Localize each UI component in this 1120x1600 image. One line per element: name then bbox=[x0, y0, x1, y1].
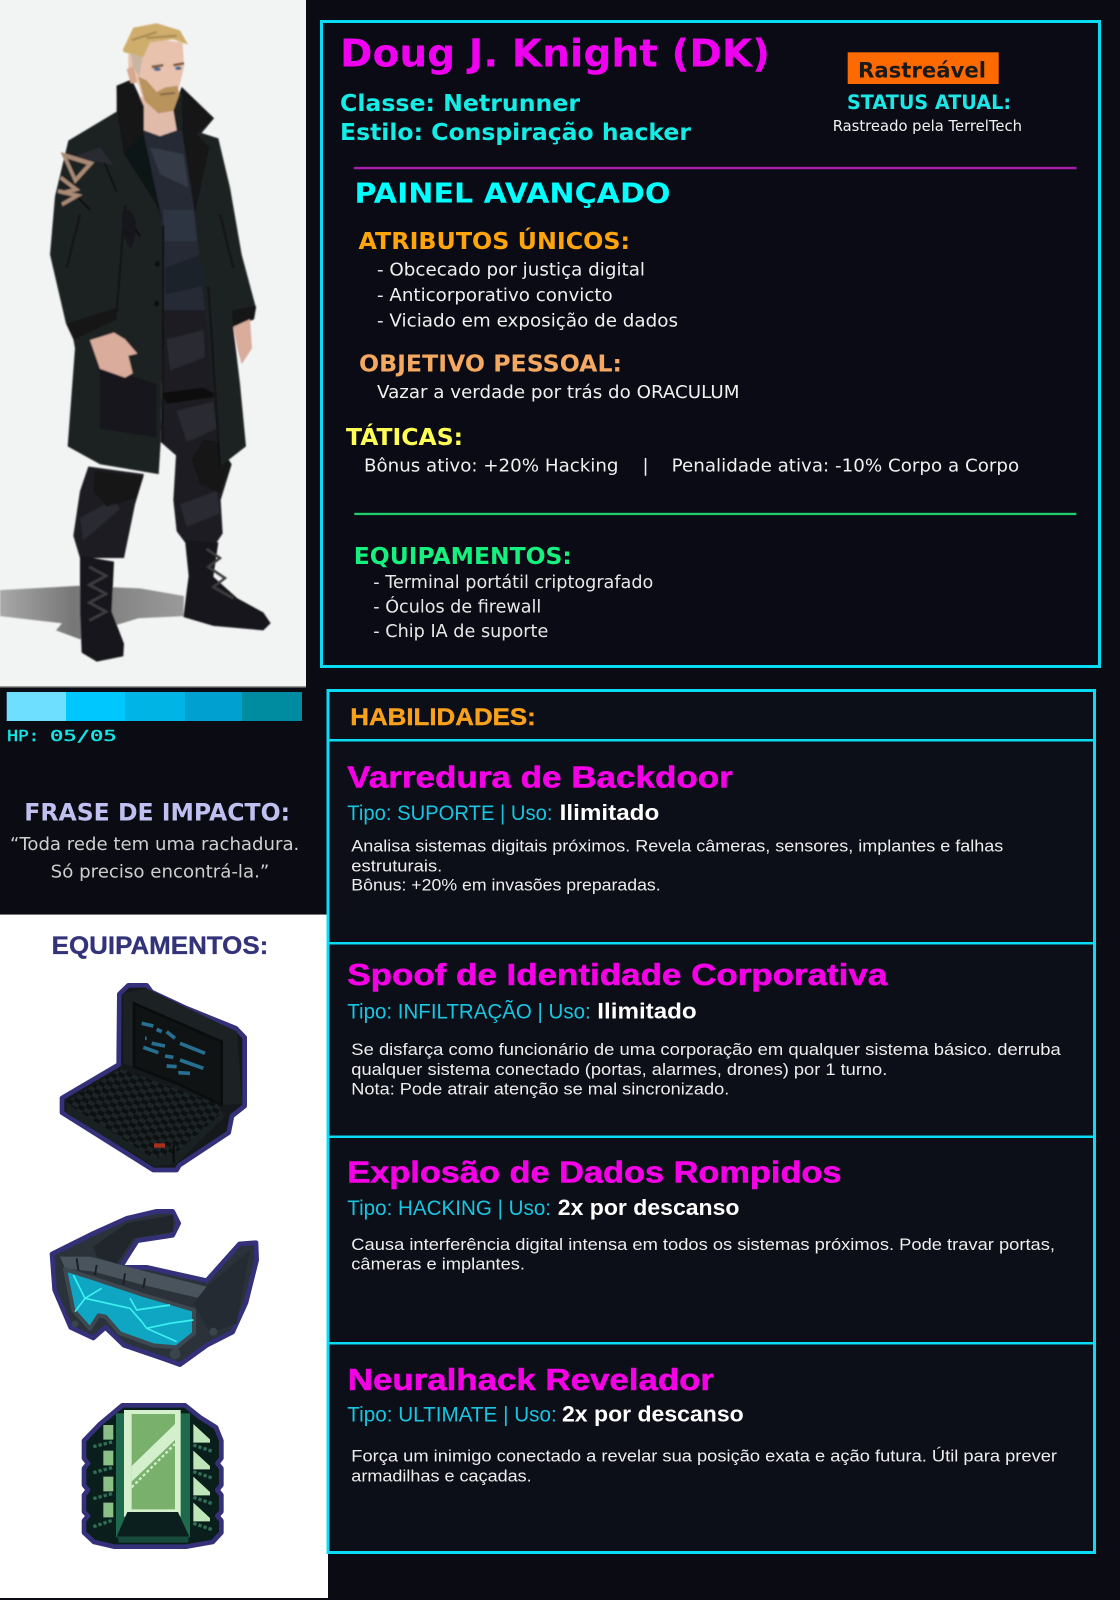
HP label bbox=[7, 727, 117, 745]
skill: Explosão de Dados Rompidos: Causa interferência digital intensa em todos os sistemas próximos. Pode travar portas, bbox=[351, 1235, 1055, 1254]
skill: Neuralhack Revelador: Força um inimigo conectado a revelar sua posição exata e ação futura. Útil para prever bbox=[351, 1447, 1057, 1466]
tactics: Penalidade ativa: -10% Corpo a Corpo bbox=[672, 455, 1019, 476]
skill: Spoof de Identidade Corporativa: Nota: Pode atrair atenção se mal sincronizado. bbox=[351, 1079, 729, 1098]
skill: Spoof de Identidade Corporativa: Tipo: INFILTRAÇÃO | Uso: bbox=[347, 998, 591, 1023]
skill: Spoof de Identidade Corporativa: Ilimitado bbox=[597, 998, 697, 1023]
neck and chest bbox=[132, 96, 177, 136]
collar and lapels bbox=[117, 79, 144, 154]
cuffs bbox=[67, 308, 117, 340]
status badge bbox=[848, 52, 999, 84]
photo panel: character portrait bbox=[0, 0, 306, 688]
skill: Neuralhack Revelador bbox=[347, 1362, 1057, 1486]
impact phrase: Só preciso encontrá-la.” bbox=[51, 862, 269, 883]
skill: Explosão de Dados Rompidos bbox=[347, 1154, 1055, 1273]
impact phrase bbox=[10, 799, 299, 883]
ground shadow bbox=[0, 586, 184, 639]
skill: Explosão de Dados Rompidos: 2x por descanso bbox=[558, 1195, 740, 1220]
skill: Varredura de Backdoor: Varredura de Backdoor bbox=[347, 759, 733, 794]
icon: AI chip bbox=[84, 1405, 221, 1547]
current status bbox=[833, 91, 1022, 135]
skills heading: HABILIDADES: bbox=[350, 704, 536, 731]
class and style bbox=[340, 91, 692, 146]
skill: Neuralhack Revelador: 2x por descanso bbox=[562, 1402, 744, 1427]
unique attributes: - Obcecado por justiça digital bbox=[377, 260, 645, 281]
coat silhouette bbox=[50, 79, 256, 474]
skill: Varredura de Backdoor: estruturais. bbox=[351, 857, 442, 876]
sleeve patch bbox=[64, 155, 91, 180]
pants bbox=[73, 467, 144, 558]
equipment list: - Terminal portátil criptografado bbox=[373, 572, 653, 593]
skill: Neuralhack Revelador: Neuralhack Revelador bbox=[348, 1362, 714, 1397]
unique attributes: - Viciado em exposição de dados bbox=[377, 310, 678, 332]
tactics bbox=[346, 423, 1019, 476]
tactics: Bônus ativo: +20% Hacking bbox=[364, 455, 618, 476]
equipment list: - Óculos de firewall bbox=[373, 596, 541, 618]
class and style: Estilo: Conspiração hacker bbox=[340, 120, 692, 146]
equipment list: - Chip IA de suporte bbox=[373, 621, 548, 642]
unique attributes: ATRIBUTOS ÚNICOS: bbox=[358, 227, 630, 255]
skill: Explosão de Dados Rompidos: câmeras e implantes. bbox=[351, 1254, 525, 1273]
unique attributes: - Anticorporativo convicto bbox=[377, 285, 613, 306]
skill: Spoof de Identidade Corporativa: Se disfarça como funcionário de uma corporação em qualquer sistema básico. derruba bbox=[351, 1040, 1061, 1059]
shirt bbox=[143, 130, 206, 324]
personal objective: Vazar a verdade por trás do ORACULUM bbox=[377, 382, 740, 403]
impact phrase: FRASE DE IMPACTO: bbox=[24, 799, 290, 827]
skill: Varredura de Backdoor: Analisa sistemas digitais próximos. Revela câmeras, sensores, implantes e falhas bbox=[351, 837, 1003, 856]
skill: Spoof de Identidade Corporativa: Spoof de Identidade Corporativa bbox=[347, 957, 888, 992]
skill: Varredura de Backdoor: Bônus: +20% em invasões preparadas. bbox=[351, 876, 661, 895]
impact phrase: “Toda rede tem uma rachadura. bbox=[10, 834, 299, 855]
HP bar bbox=[7, 692, 302, 721]
folds bbox=[67, 152, 233, 467]
tactics: TÁTICAS: bbox=[346, 423, 463, 451]
skill: Neuralhack Revelador: armadilhas e caçadas. bbox=[351, 1467, 532, 1486]
lens bbox=[65, 1269, 194, 1347]
boots bbox=[80, 556, 124, 662]
skill: Explosão de Dados Rompidos: Tipo: HACKING | Uso: bbox=[347, 1196, 551, 1220]
tactics: | bbox=[642, 455, 649, 476]
equipment list bbox=[354, 544, 653, 642]
panel: skills bbox=[328, 690, 1094, 1552]
skill: Varredura de Backdoor: Tipo: SUPORTE | Uso: bbox=[347, 801, 552, 825]
skill: Spoof de Identidade Corporativa: qualquer sistema conectado (portas, alarmes, drones) por 1 turno. bbox=[351, 1060, 887, 1079]
advanced panel heading: PAINEL AVANÇADO bbox=[354, 177, 670, 210]
hands bbox=[90, 333, 137, 378]
skill: Explosão de Dados Rompidos: Explosão de Dados Rompidos bbox=[347, 1154, 842, 1189]
equipment list: EQUIPAMENTOS: bbox=[354, 544, 572, 570]
panel: character sheet bbox=[322, 22, 1100, 666]
character name: Doug J. Knight (DK) bbox=[340, 32, 770, 76]
equipment column bbox=[0, 914, 328, 1598]
current status: Rastreado pela TerrelTech bbox=[833, 117, 1022, 135]
status badge: Rastreável bbox=[858, 58, 986, 82]
icon: firewall goggles bbox=[52, 1211, 257, 1365]
current status: STATUS ATUAL: bbox=[847, 91, 1011, 114]
personal objective bbox=[359, 352, 740, 403]
icon: laptop bbox=[62, 985, 245, 1170]
HP label: HP: bbox=[7, 727, 39, 745]
skill: Spoof de Identidade Corporativa bbox=[347, 957, 1061, 1098]
skill: Varredura de Backdoor: Ilimitado bbox=[560, 800, 659, 825]
personal objective: OBJETIVO PESSOAL: bbox=[359, 352, 622, 378]
head bbox=[128, 38, 184, 113]
equipment heading: EQUIPAMENTOS: bbox=[52, 932, 268, 960]
HP label: 05/05 bbox=[50, 727, 117, 745]
skill: Neuralhack Revelador: Tipo: ULTIMATE | Uso: bbox=[347, 1403, 557, 1427]
skill: Varredura de Backdoor bbox=[347, 759, 1003, 895]
unique attributes bbox=[358, 227, 678, 332]
class and style: Classe: Netrunner bbox=[340, 91, 581, 117]
